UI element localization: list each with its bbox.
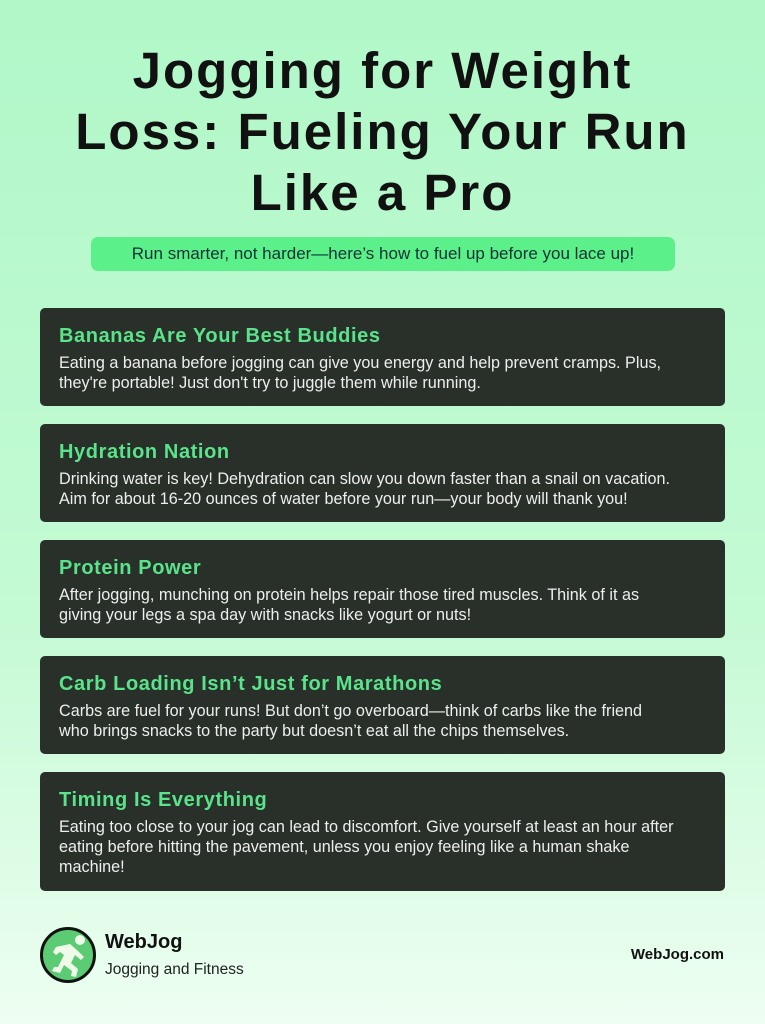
brand tagline: Jogging and Fitness: [105, 961, 244, 978]
panel: carbs: Carbs are fuel for your runs! But don’t go overboard—think of carbs like the friend: [59, 702, 642, 720]
title: Like a Pro: [251, 164, 514, 221]
subtitle pill: Run smarter, not harder—here’s how to fuel up before you lace up!: [132, 244, 634, 263]
panel: bananas: [40, 308, 725, 406]
title: Loss: Fueling Your Run: [75, 103, 690, 160]
title: [75, 42, 690, 221]
panel: carbs: who brings snacks to the party but doesn’t eat all the chips themselves.: [59, 722, 569, 740]
panel: timing: Eating too close to your jog can lead to discomfort. Give yourself at least an hour after: [59, 818, 674, 836]
panel: timing: Timing Is Everything: [59, 789, 267, 811]
icon: runner logo: [40, 927, 96, 983]
panel: bananas: they're portable! Just don't try to juggle them while running.: [59, 374, 481, 392]
panel: protein: giving your legs a spa day with snacks like yogurt or nuts!: [59, 606, 471, 624]
panel: protein: [40, 540, 725, 638]
website: WebJog.com: [631, 946, 724, 963]
panel: hydration: Drinking water is key! Dehydration can slow you down faster than a snail on vacation.: [59, 470, 670, 488]
title: Jogging for Weight: [133, 42, 632, 99]
panel: carbs: [40, 656, 725, 754]
brand name: WebJog: [105, 931, 182, 953]
panel: carbs: Carb Loading Isn’t Just for Marathons: [59, 673, 442, 695]
panel: timing: [40, 772, 725, 891]
panel: hydration: Aim for about 16-20 ounces of water before your run—your body will thank you!: [59, 490, 628, 508]
panel: protein: Protein Power: [59, 557, 201, 579]
panel: timing: machine!: [59, 858, 125, 876]
panel: bananas: Bananas Are Your Best Buddies: [59, 325, 381, 347]
panel: hydration: Hydration Nation: [59, 441, 230, 463]
panel: timing: eating before hitting the pavement, unless you enjoy feeling like a human shake: [59, 838, 630, 856]
panel: hydration: [40, 424, 725, 522]
subtitle pill: [91, 237, 675, 271]
panel: bananas: Eating a banana before jogging can give you energy and help prevent cramps. Plus,: [59, 354, 661, 372]
panel: protein: After jogging, munching on protein helps repair those tired muscles. Think of it as: [59, 586, 639, 604]
